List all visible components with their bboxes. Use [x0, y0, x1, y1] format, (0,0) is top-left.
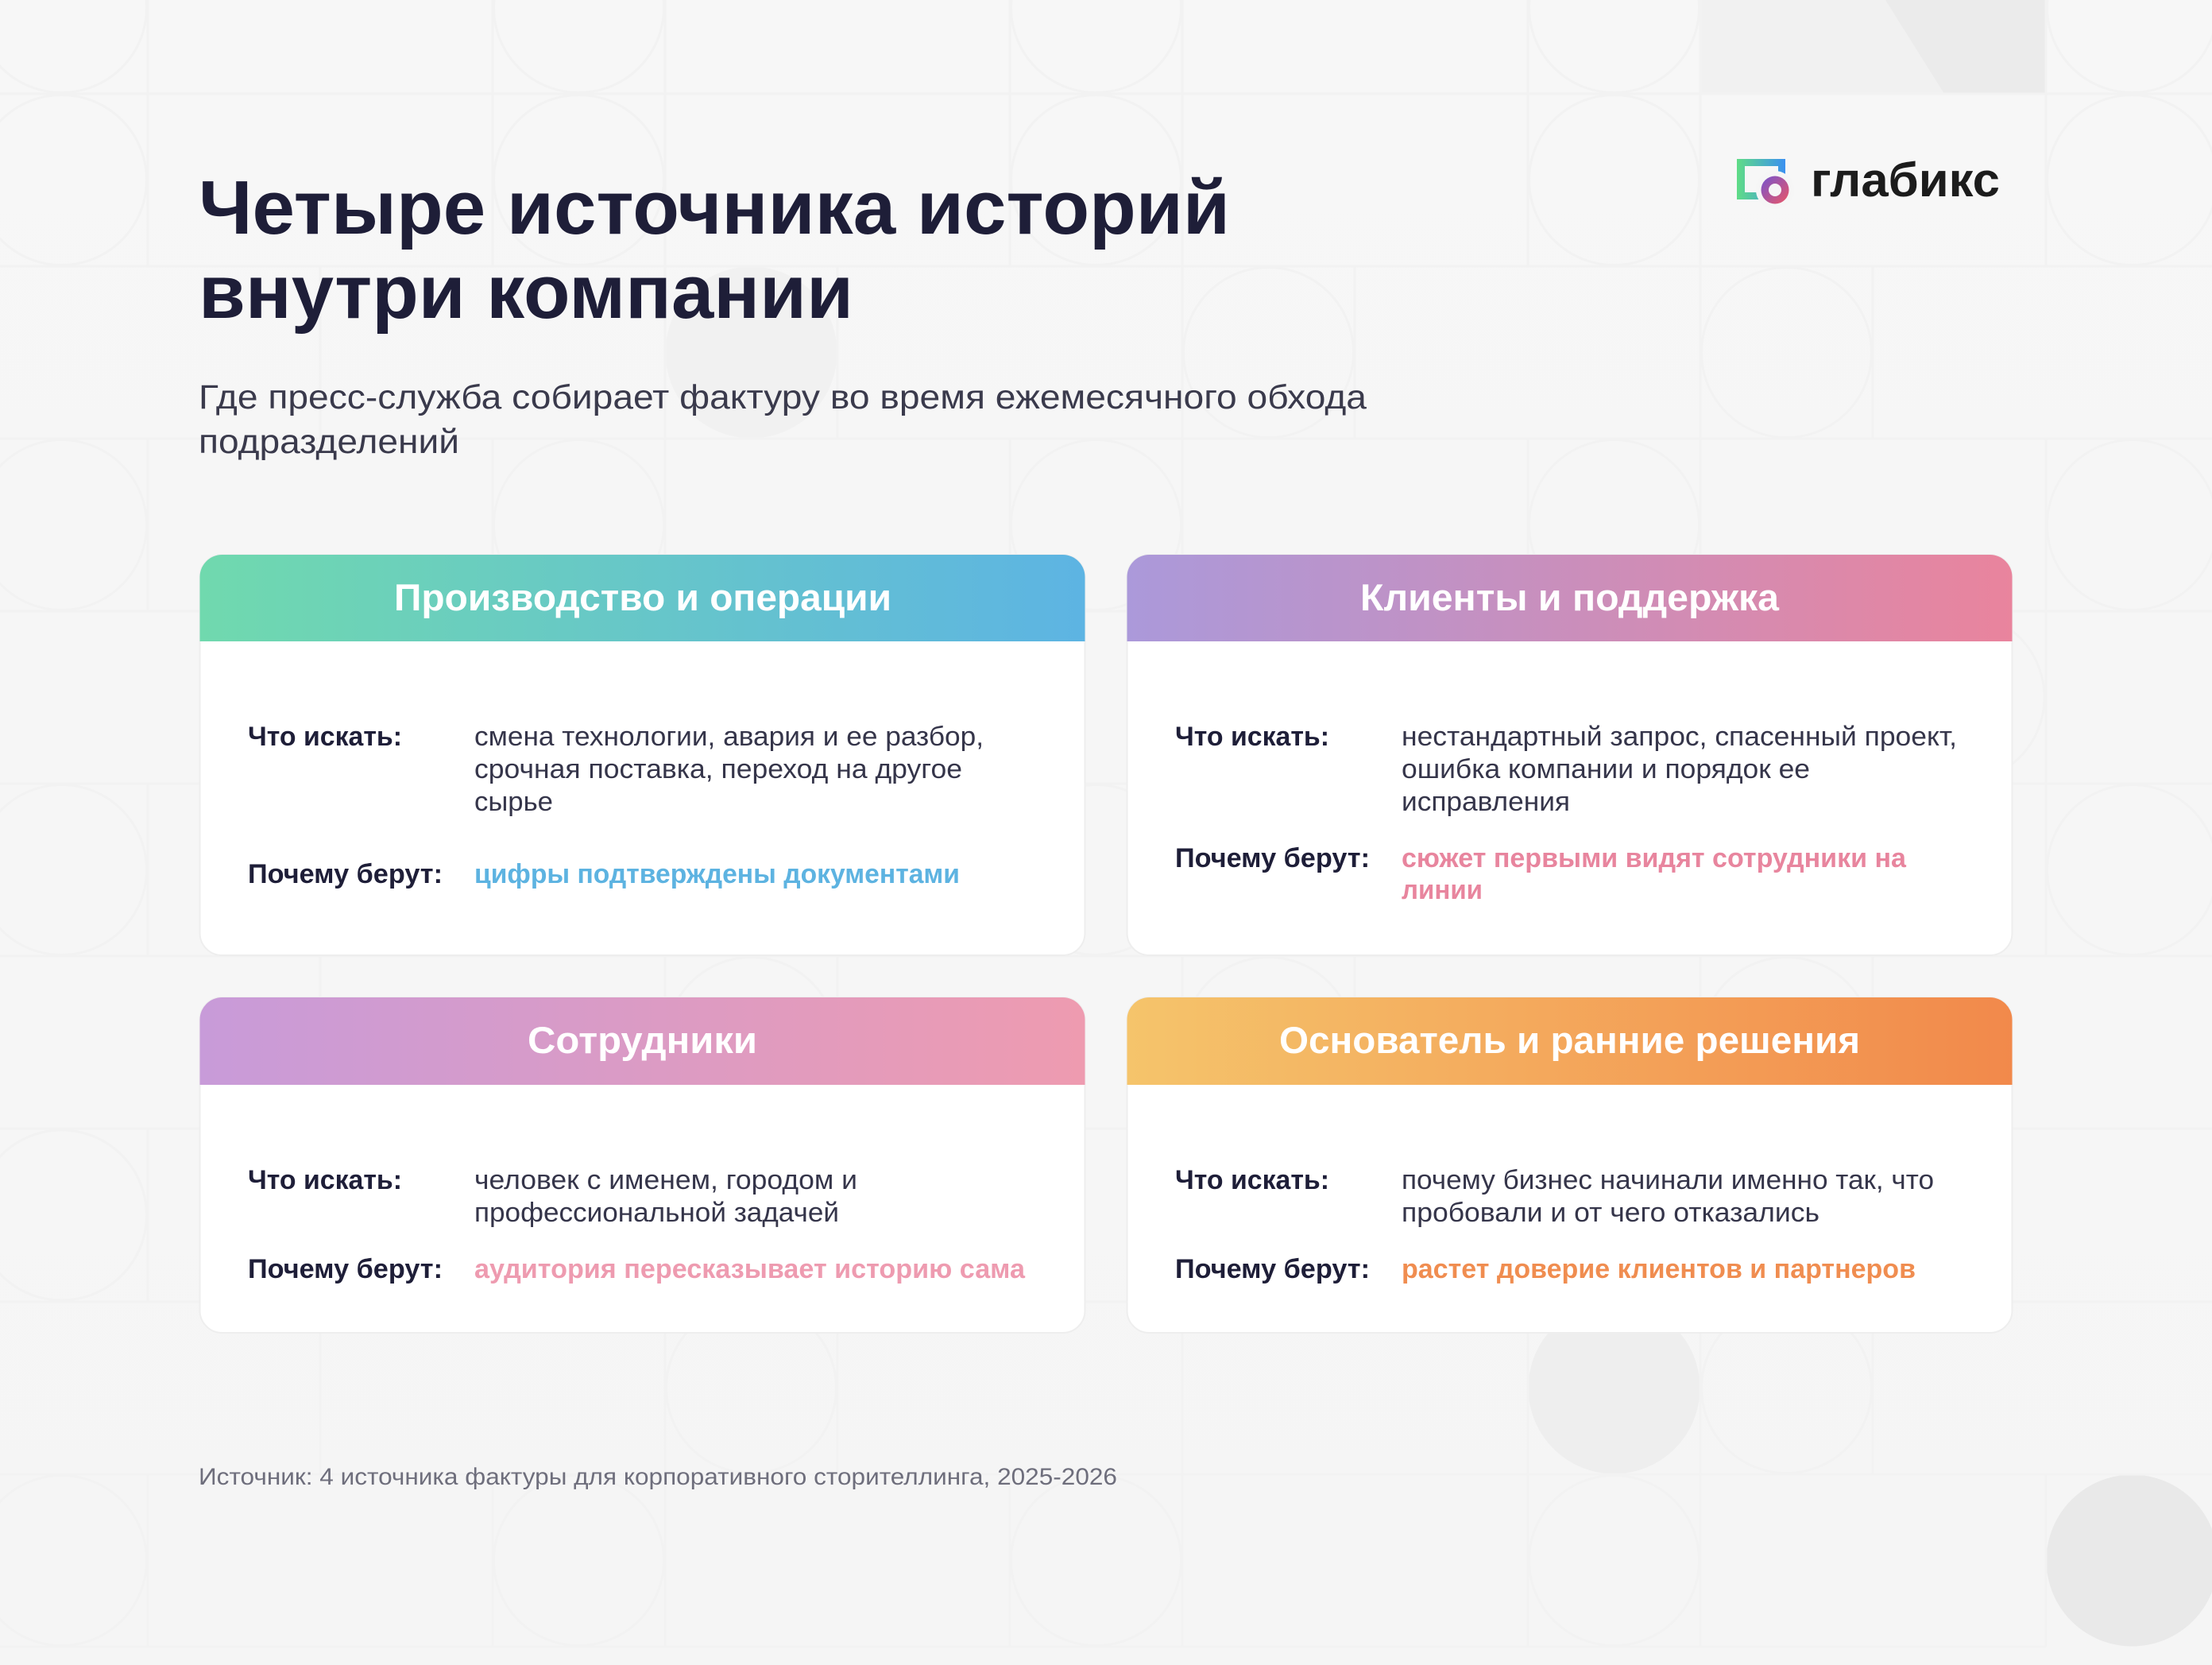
logo wordmark: глабикс	[1811, 153, 2000, 207]
text: что искать	[474, 722, 984, 817]
card header: Сотрудники	[200, 997, 1085, 1085]
text: что искать: нестандартный запрос, спасенный проект,	[1402, 722, 1957, 752]
title	[199, 165, 1230, 335]
highlight: почему берут	[1402, 843, 1907, 905]
text: что искать: пробовали и от чего отказались	[1402, 1198, 1819, 1228]
text: что искать: человек с именем, городом и	[474, 1165, 857, 1195]
text: что искать	[474, 1165, 857, 1228]
text: что искать: профессиональной задачей	[474, 1198, 839, 1228]
label: почему берут: Почему берут:	[248, 859, 443, 889]
card header: Основатель и ранние решения	[1127, 997, 2012, 1085]
card header: Производство и операции: Производство и операции	[394, 576, 891, 618]
card header: Сотрудники: Сотрудники	[528, 1019, 757, 1061]
highlight: почему берут: растет доверие клиентов и партнеров	[1402, 1254, 1916, 1284]
label: что искать: Что искать:	[1175, 1165, 1329, 1195]
icon: logo mark	[1737, 159, 1794, 209]
logo: глабикс	[1737, 153, 2000, 209]
label: почему берут: Почему берут:	[1175, 843, 1370, 873]
text: что искать: сырье	[474, 787, 553, 817]
text: что искать: смена технологии, авария и ее разбор,	[474, 722, 984, 752]
label: почему берут: Почему берут:	[248, 1254, 443, 1284]
text: что искать: ошибка компании и порядок ее	[1402, 754, 1810, 784]
title: внутри компании	[199, 250, 853, 335]
card header: Клиенты и поддержка	[1127, 555, 2012, 641]
label: что искать: Что искать:	[1175, 722, 1329, 752]
text: что искать: исправления	[1402, 787, 1570, 817]
highlight: почему берут: линии	[1402, 875, 1483, 905]
card header: Клиенты и поддержка: Клиенты и поддержка	[1360, 576, 1780, 618]
card header: Производство и операции	[200, 555, 1085, 641]
subtitle: Где пресс-служба собирает фактуру во время ежемесячного обхода	[199, 378, 1367, 416]
title: Четыре источника историй	[199, 165, 1230, 250]
source footnote: Источник: 4 источника фактуры для корпоративного сторителлинга, 2025-2026	[199, 1464, 1117, 1490]
highlight: почему берут: цифры подтверждены документами	[474, 859, 960, 889]
panel: Производство и операции	[200, 555, 1085, 955]
label: что искать: Что искать:	[248, 722, 402, 752]
text: что искать: срочная поставка, переход на другое	[474, 754, 962, 784]
highlight: почему берут: сюжет первыми видят сотрудники на	[1402, 843, 1907, 873]
panel: Сотрудники	[200, 997, 1085, 1333]
subtitle	[199, 378, 1367, 461]
text: что искать: почему бизнес начинали именно так, что	[1402, 1165, 1934, 1195]
label: что искать: Что искать:	[248, 1165, 402, 1195]
card header: Основатель и ранние решения: Основатель и ранние решения	[1279, 1019, 1860, 1061]
text: что искать	[1402, 722, 1957, 817]
highlight: почему берут: аудитория пересказывает историю сама	[474, 1254, 1026, 1284]
text: что искать	[1402, 1165, 1934, 1228]
panel: Основатель и ранние решения	[1127, 997, 2012, 1333]
panel: Клиенты и поддержка	[1127, 555, 2012, 955]
subtitle: подразделений	[199, 423, 459, 461]
label: почему берут: Почему берут:	[1175, 1254, 1370, 1284]
